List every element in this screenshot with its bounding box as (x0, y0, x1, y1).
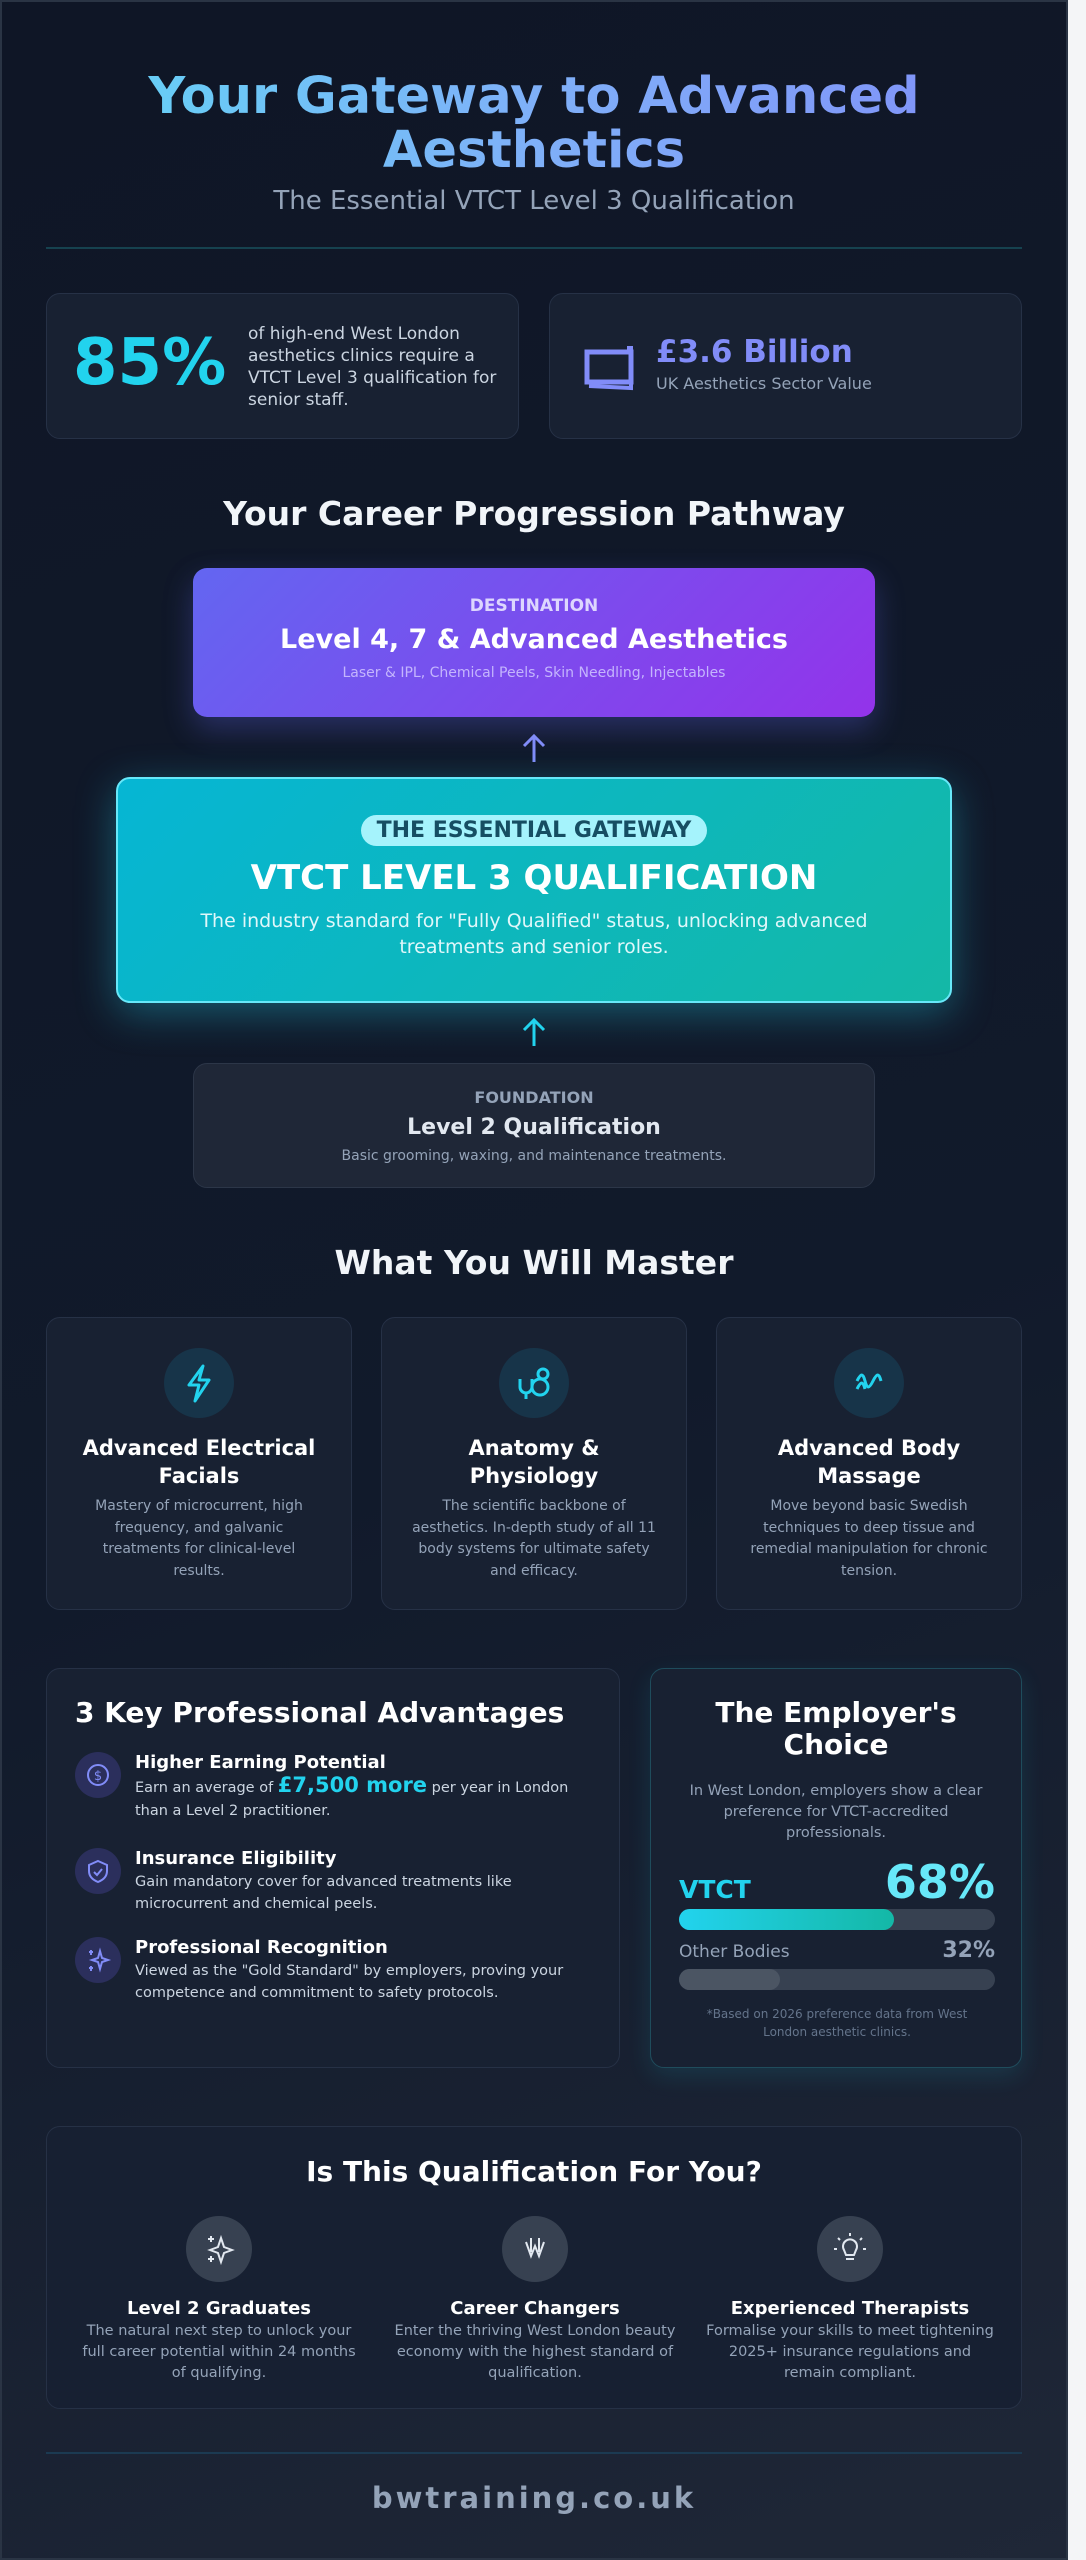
card: body massage (716, 1317, 1022, 1610)
title (0, 70, 1068, 178)
card: anatomy: The scientific backbone of aesthetics. In-depth study of all 11 body systems for ultimate safety and efficacy. (412, 1498, 656, 1578)
panel: employer's choice: The Employer's (715, 1696, 957, 1729)
card: body massage: Advanced Body (778, 1436, 960, 1460)
pathway: foundation: Level 2 Qualification (407, 1115, 661, 1140)
arrow up (523, 734, 545, 762)
heading: pathway: Your Career Progression Pathway (223, 494, 845, 533)
item: earning: Earn an average of £7,500 more per year in London than a Level 2 practitioner. (135, 1773, 568, 1819)
card: anatomy: Anatomy & (468, 1436, 600, 1460)
item: recognition: Viewed as the "Gold Standard" by employers, proving your competence and commitment to safety protocols. (135, 1963, 563, 2001)
stat label: UK Aesthetics Sector Value (656, 374, 872, 393)
icon: dollar: $ (94, 1769, 102, 1784)
pathway: gateway (116, 777, 952, 1003)
persona: graduates (82, 2216, 356, 2381)
panel: for you (46, 2126, 1022, 2409)
stat card: 85% (46, 293, 519, 439)
bar chart: Other Bodies (679, 1942, 790, 1962)
persona: career changers: Enter the thriving West London beauty economy with the highest standard of qualification. (395, 2323, 675, 2381)
panel: advantages (46, 1668, 620, 2068)
pathway: foundation (193, 1063, 875, 1188)
persona: experienced (706, 2216, 994, 2381)
heading: master: What You Will Master (335, 1243, 733, 1282)
pathway: destination: DESTINATION (470, 596, 598, 616)
icon: sparkle (75, 1937, 121, 1983)
card: anatomy: Physiology (470, 1464, 598, 1488)
item: earning (75, 1752, 568, 1819)
title: Aesthetics (383, 121, 685, 180)
card: electrical facials: Mastery of microcurrent, high frequency, and galvanic treatments for clinical-level results. (95, 1498, 303, 1578)
pathway: destination (193, 568, 875, 717)
pathway: destination: Laser & IPL, Chemical Peels, Skin Needling, Injectables (342, 665, 725, 681)
item: insurance: Insurance Eligibility (135, 1848, 336, 1869)
persona: career changers: Career Changers (450, 2298, 620, 2319)
subtitle: The Essential VTCT Level 3 Qualification (273, 186, 795, 216)
arrow up (523, 1018, 545, 1046)
pathway: foundation: FOUNDATION (474, 1088, 594, 1107)
item: insurance: Gain mandatory cover for advanced treatments like microcurrent and chemical peels. (135, 1874, 512, 1912)
panel: employer's choice (650, 1668, 1022, 2068)
stat value: £3.6 Billion (656, 334, 853, 370)
bar chart: VTCT (679, 1875, 751, 1904)
footer: bwtraining.co.uk (372, 2481, 696, 2515)
panel: employer's choice: Choice (784, 1728, 888, 1761)
card: anatomy (381, 1317, 687, 1610)
title: Your Gateway to Advanced (148, 67, 920, 126)
icon: stethoscope (499, 1348, 569, 1418)
icon: dollar (75, 1752, 121, 1798)
stat text: of high-end West London aesthetics clinics require a VTCT Level 3 qualification for senior staff. (248, 324, 496, 410)
panel: for you: Is This Qualification For You? (306, 2155, 762, 2188)
icon: waves (834, 1348, 904, 1418)
panel: employer's choice: In West London, employers show a clear preference for VTCT-accredited professionals. (690, 1783, 982, 1841)
card: electrical facials: Advanced Electrical (83, 1436, 315, 1460)
stat number: 85% (73, 326, 226, 400)
item: recognition: Professional Recognition (135, 1937, 388, 1958)
card: electrical facials: Facials (159, 1464, 239, 1488)
card: body massage: Move beyond basic Swedish techniques to deep tissue and remedial manipulation for chronic tension. (750, 1498, 988, 1578)
bar chart: 32% (942, 1938, 995, 1963)
persona: graduates: Level 2 Graduates (127, 2298, 311, 2319)
pathway: destination: Level 4, 7 & Advanced Aesthetics (280, 624, 788, 655)
badge: THE ESSENTIAL GATEWAY (377, 818, 691, 843)
icon: shield (75, 1848, 121, 1894)
persona: graduates: The natural next step to unlock your full career potential within 24 months of qualifying. (82, 2323, 356, 2381)
heading: 3 Key Professional Advantages (75, 1696, 564, 1729)
icon: banknotes (584, 346, 634, 390)
pathway: gateway: VTCT LEVEL 3 QUALIFICATION (251, 858, 817, 898)
persona: experienced: Experienced Therapists (731, 2298, 969, 2319)
persona: career changers (395, 2216, 675, 2381)
stat card: sector value (549, 293, 1022, 439)
bar chart (679, 1855, 995, 1990)
item: insurance (75, 1848, 512, 1912)
item: earning: Higher Earning Potential (135, 1752, 386, 1773)
icon: lightning (164, 1348, 234, 1418)
pathway: foundation: Basic grooming, waxing, and maintenance treatments. (342, 1148, 726, 1164)
pathway: gateway: The industry standard for "Fully Qualified" status, unlocking advanced treatments and senior roles. (200, 910, 868, 958)
card: body massage: Massage (817, 1464, 921, 1488)
footnote: *Based on 2026 preference data from West London aesthetic clinics. (707, 2007, 967, 2039)
item: recognition (75, 1937, 564, 2001)
persona: experienced: Formalise your skills to meet tightening 2025+ insurance regulations and remain compliant. (706, 2323, 994, 2381)
card: electrical facials (46, 1317, 352, 1610)
bar chart: 68% (885, 1855, 995, 1909)
